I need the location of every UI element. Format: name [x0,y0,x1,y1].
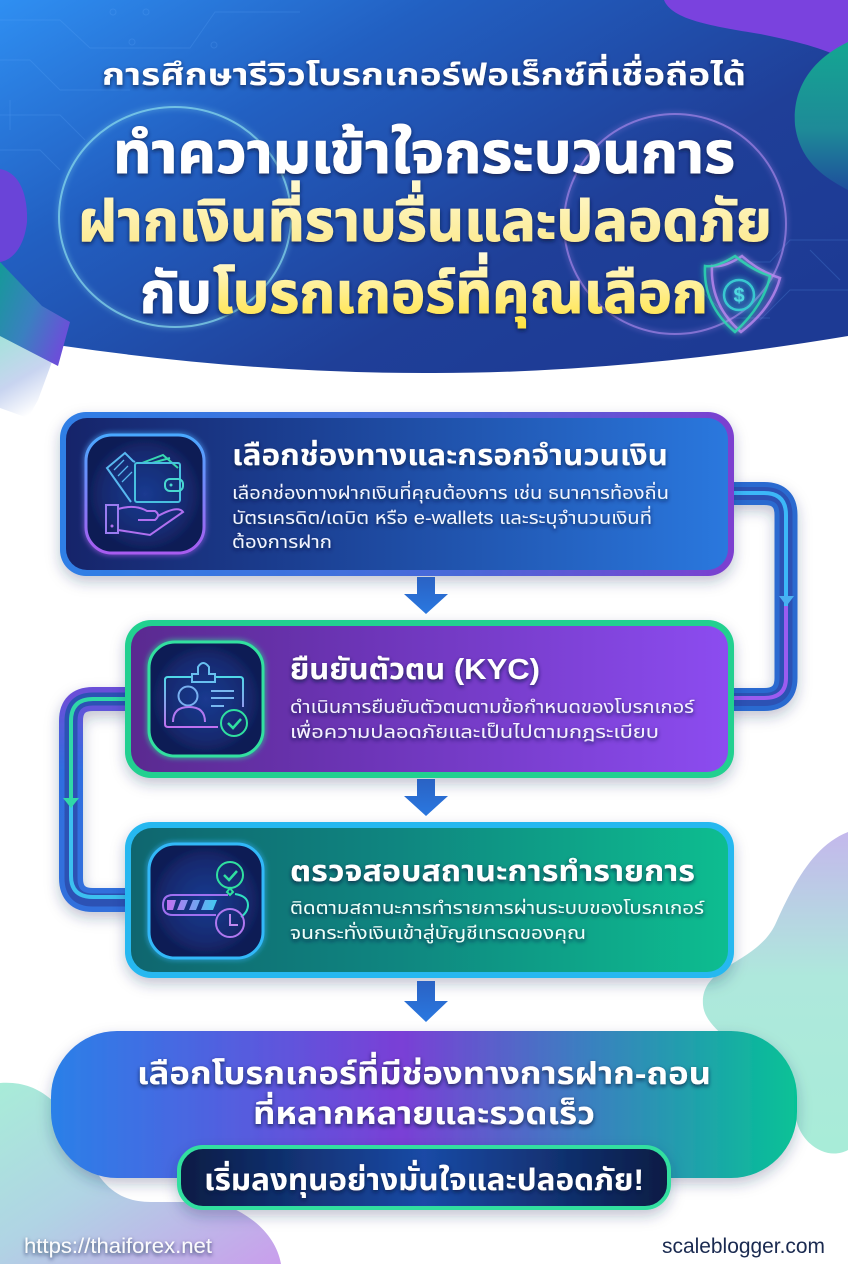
body text: จนกระทั่งเงินเข้าสู่บัญชีเทรดของคุณ [290,921,586,945]
glowing rings [59,107,786,334]
icon: shield with dollar [705,256,780,332]
arrowhead [63,798,79,808]
heading: ยืนยันตัวตน (KYC) [290,654,540,686]
CTA button: เริ่มลงทุนอย่างมั่นใจและปลอดภัย! [204,1159,644,1198]
circuit pattern [0,9,848,320]
panel: step 2 [125,620,734,778]
header decorative blobs [0,0,848,366]
background blob: bottom right [703,832,848,1154]
arrow: step 2 to 3 [404,779,448,816]
icon: progress bar and clock [149,844,263,958]
heading: ตรวจสอบสถานะการทำรายการ [290,856,695,888]
connector: step 1 to step 2 [728,493,794,700]
body text: บัตรเครดิต/เดบิต หรือ e-wallets และระบุจำนวนเงินที่ [232,505,652,529]
CTA text: เลือกโบรกเกอร์ที่มีช่องทางการฝาก-ถอน [137,1051,711,1091]
title: ทำความเข้าใจกระบวนการ [113,121,735,186]
footer link left: https://thaiforex.net [24,1235,212,1258]
title [78,121,772,328]
icon: shield with dollar: $ [733,285,745,307]
background blob: bottom left [0,1083,281,1264]
body text: ติดตามสถานะการทำรายการผ่านระบบของโบรกเกอร์ [290,898,705,918]
subtitle: การศึกษารีวิวโบรกเกอร์ฟอเร็กซ์ที่เชื่อถือได้ [102,53,746,92]
icon: ID badge with check [149,642,263,756]
body text [290,697,695,742]
title: กับ [140,261,212,326]
icon: wallet and hand [86,435,204,553]
CTA text [137,1051,711,1131]
header banner [0,0,848,373]
footer link right: scaleblogger.com [662,1235,825,1258]
title: ฝากเงินที่ราบรื่นและปลอดภัย [78,180,772,254]
CTA text: ที่หลากหลายและรวดเร็ว [253,1091,595,1131]
background blob: left pale wedge [0,330,60,418]
arrowhead [779,596,794,606]
body text: เลือกช่องทางฝากเงินที่คุณต้องการ เช่น ธนาคารท้องถิ่น [232,480,669,504]
body text [290,898,705,945]
panel: call to action [51,1031,797,1208]
panel: step 3 [125,822,734,978]
arrow: step 1 to 2 [404,577,448,614]
connector: step 2 to step 3 [63,699,132,900]
body text: เพื่อความปลอดภัยและเป็นไปตามกฎระเบียบ [290,719,659,742]
panel: step 1 [60,412,734,576]
heading: เลือกช่องทางและกรอกจำนวนเงิน [232,440,668,472]
CTA button [179,1147,669,1208]
body text: ดำเนินการยืนยันตัวตนตามข้อกำหนดของโบรกเกอร์ [290,697,695,717]
arrow: step 3 to CTA [404,981,448,1022]
body text: ต้องการฝาก [232,532,332,552]
body text [232,480,669,552]
title: โบรกเกอร์ที่คุณเลือก [213,252,708,328]
